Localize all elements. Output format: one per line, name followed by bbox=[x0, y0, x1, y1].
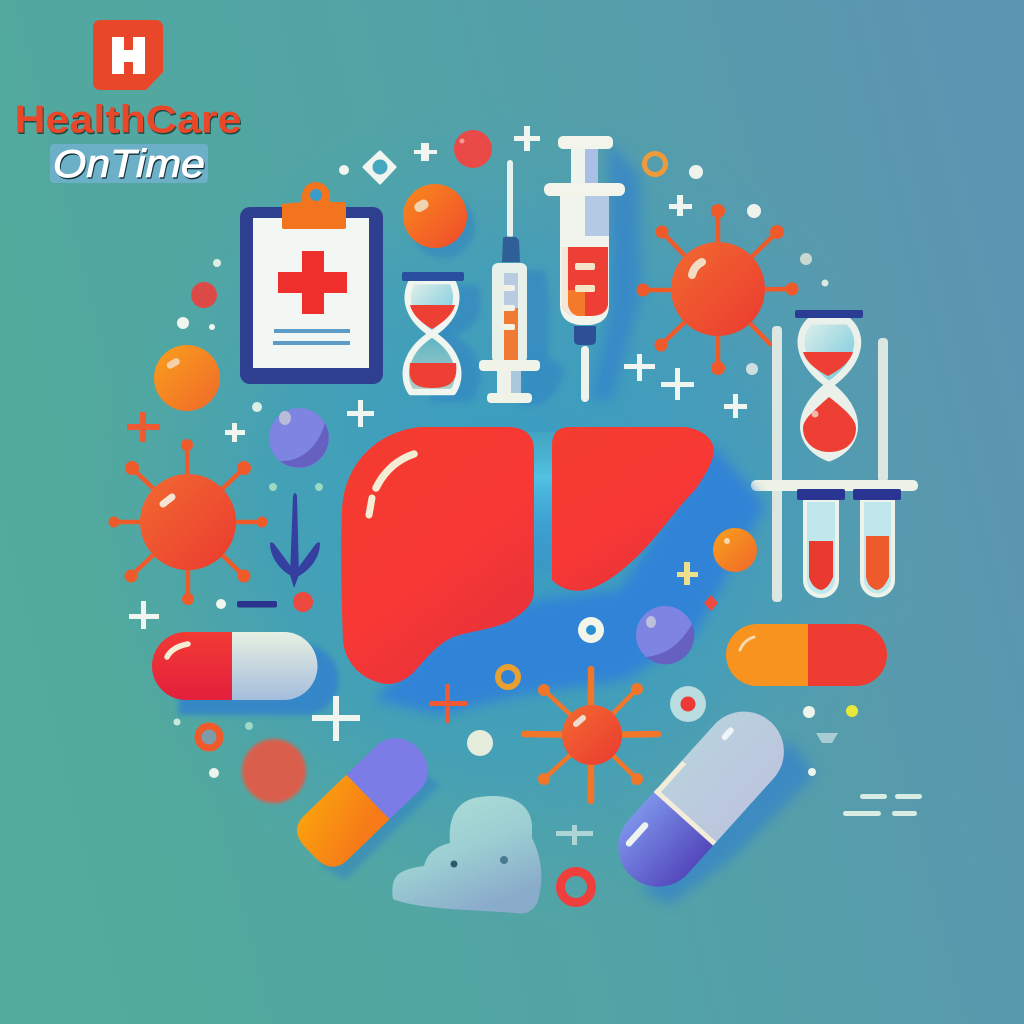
logo icon bbox=[93, 20, 163, 90]
icon: ring red bottom bbox=[560, 872, 592, 902]
test tube left bbox=[797, 489, 845, 596]
liver highlight bbox=[369, 454, 414, 515]
icon: small orange ball right bbox=[713, 528, 757, 572]
icon: purple ball left bbox=[269, 408, 329, 468]
icon: virus left bbox=[108, 439, 268, 605]
logo badge bbox=[50, 144, 208, 183]
icon: virus bottom bbox=[524, 669, 658, 801]
decorations: red plus signs bbox=[127, 412, 467, 723]
icon: cloud bbox=[392, 796, 541, 914]
icon: test tube rack bbox=[751, 326, 918, 602]
icon: blurry red ball bbox=[242, 739, 306, 803]
icon: virus top right bbox=[636, 204, 798, 375]
liver left lobe bbox=[341, 427, 534, 684]
liver shadow bbox=[375, 445, 765, 715]
test tube right bbox=[853, 489, 901, 596]
icon: small purple ball right bbox=[636, 606, 694, 664]
icon: hourglass large bbox=[795, 310, 863, 458]
decorations: dashes right bbox=[843, 794, 922, 816]
liver right lobe bbox=[552, 427, 714, 591]
icon: minus and dot bbox=[216, 592, 313, 612]
icon: purple orange capsule bbox=[289, 726, 440, 880]
icon: orange ball top bbox=[403, 184, 475, 258]
icon: red white pill bbox=[152, 632, 339, 715]
logo: HealthCare OnTime: HealthCare bbox=[14, 98, 241, 142]
decorations: plus signs bbox=[129, 126, 747, 845]
icon: small red ball top bbox=[454, 130, 492, 168]
icon: clipboard bbox=[240, 182, 383, 384]
icon: liver bbox=[341, 427, 765, 715]
icon: large syringe bbox=[544, 136, 640, 402]
decorations: rings and dots bbox=[174, 152, 858, 778]
icon: hourglass small bbox=[402, 272, 481, 402]
icon: arrow down bbox=[270, 493, 320, 588]
icon: large blue white capsule bbox=[602, 695, 815, 905]
logo name: HealthCare bbox=[16, 100, 242, 143]
logo: HealthCare OnTime bbox=[14, 20, 242, 188]
icon: orange red pill bbox=[726, 624, 887, 686]
icon: small syringe bbox=[479, 160, 565, 405]
logo: HealthCare OnTime: OnTime bbox=[54, 144, 206, 188]
icon: orange ball left bbox=[154, 345, 220, 411]
logo: HealthCare OnTime: OnTime bbox=[53, 143, 205, 186]
